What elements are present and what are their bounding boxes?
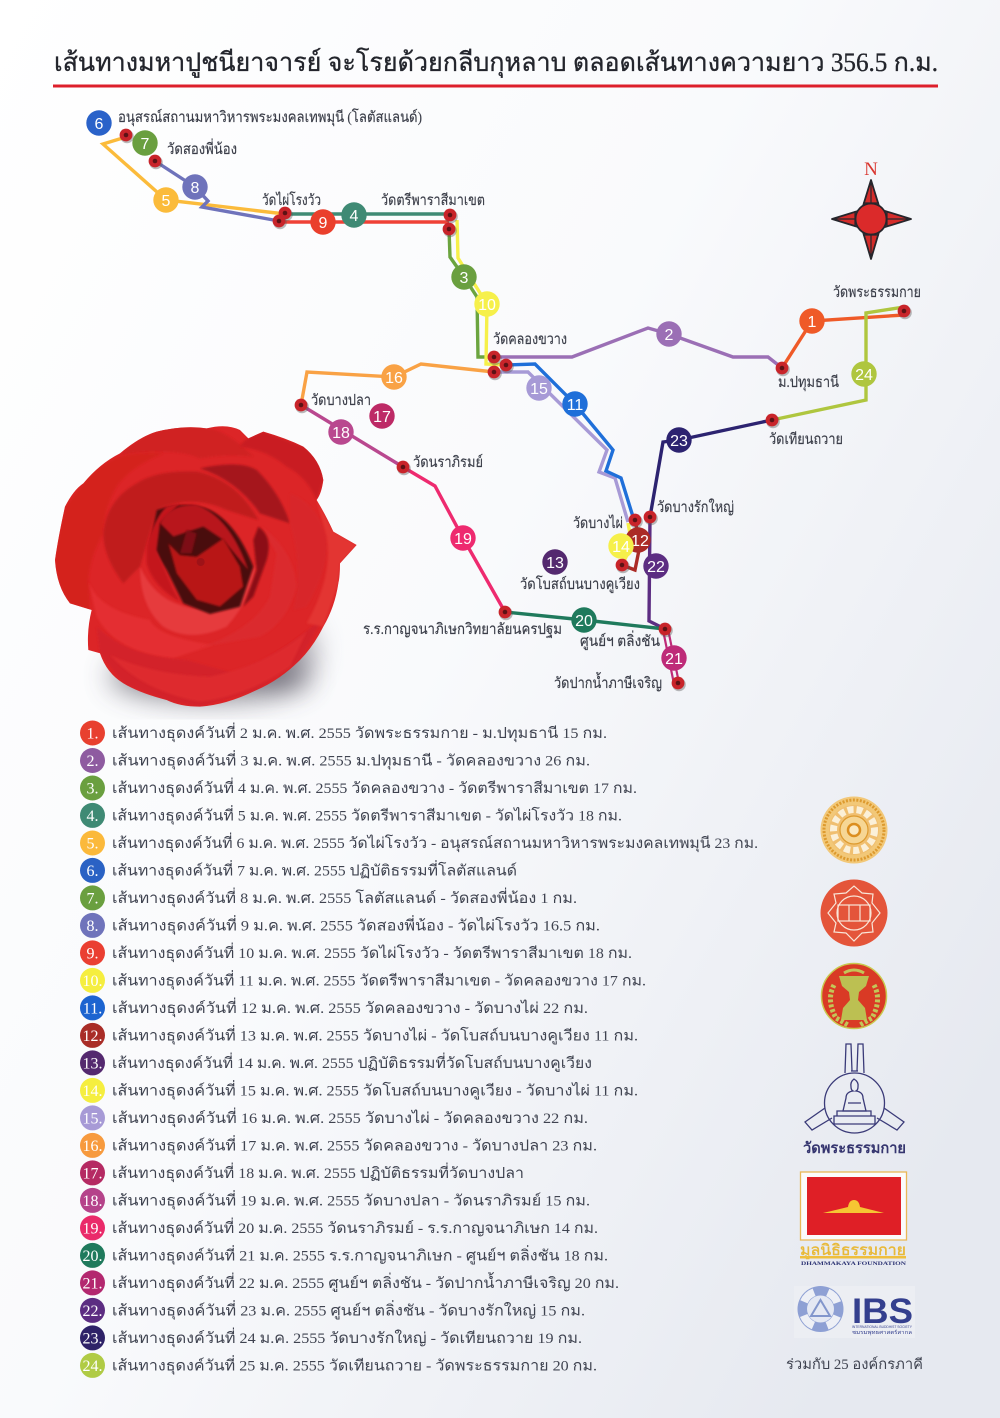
- row 21: 21.: [82, 1275, 102, 1292]
- bud: [168, 538, 243, 607]
- badge 2: [656, 321, 682, 347]
- route schedule list: [80, 720, 758, 1378]
- row 3: [80, 776, 637, 800]
- row 17: เส้นทางธุดงค์วันที่ 18 ม.ค. พ.ศ. 2555 ปฏิบัติธรรมที่วัดบางปลา: [112, 1162, 524, 1183]
- badge 21: [661, 645, 687, 671]
- row 23: เส้นทางธุดงค์วันที่ 24 ม.ค. 2555 วัดบางรักใหญ่ - วัดเทียนถวาย 19 กม.: [112, 1327, 582, 1348]
- logo: red lotus seal: [820, 880, 888, 946]
- row 6: 6.: [86, 863, 98, 880]
- badge 9: 9: [319, 215, 328, 232]
- row 2: เส้นทางธุดงค์วันที่ 3 ม.ค. พ.ศ. 2555 ม.ปทุมธานี - วัดคลองขวาง 26 กม.: [112, 750, 590, 770]
- row 7: เส้นทางธุดงค์วันที่ 8 ม.ค. พ.ศ. 2555 โลตัสแลนด์ - วัดสองพี่น้อง 1 กม.: [112, 887, 577, 908]
- row 3: เส้นทางธุดงค์วันที่ 4 ม.ค. พ.ศ. 2555 วัดคลองขวาง - วัดตรีพาราสีมาเขต 17 กม.: [112, 777, 637, 798]
- title rule: [53, 84, 938, 88]
- row 21: [80, 1270, 619, 1295]
- row 15: เส้นทางธุดงค์วันที่ 16 ม.ค. พ.ศ. 2555 วัดบางไผ่ - วัดคลองขวาง 22 กม.: [112, 1107, 588, 1128]
- row 23: [80, 1325, 582, 1350]
- badge 9: [310, 209, 336, 235]
- row 14: 14.: [82, 1083, 102, 1100]
- row 7: 7.: [86, 890, 98, 907]
- badge 3: [451, 264, 477, 290]
- row 12: 12.: [82, 1028, 102, 1045]
- row 20: 20.: [82, 1248, 102, 1265]
- upper right petal: [240, 432, 323, 500]
- label: Wat Naraphirom: วัดนราภิรมย์: [413, 454, 483, 471]
- badge 13: [542, 549, 568, 575]
- label: Wat Phai Rong Wua: วัดไผ่โรงวัว: [262, 191, 321, 209]
- row 11: [80, 995, 588, 1020]
- row 17: 17.: [82, 1165, 102, 1182]
- row 17: [80, 1160, 524, 1185]
- logo: IBS: IBS: [852, 1292, 913, 1331]
- logo: Dhammakaya Foundation: DHAMMAKAYA FOUNDATION: [801, 1261, 906, 1267]
- badge 23: 23: [670, 433, 688, 450]
- badge 19: 19: [454, 531, 472, 548]
- row 9: [80, 940, 632, 965]
- badge 11: 11: [567, 397, 583, 414]
- logo: parliament seal: [822, 964, 886, 1028]
- rose: [55, 426, 357, 707]
- route 19: [403, 467, 505, 612]
- right mid petal: [290, 493, 327, 610]
- route 21 return: [668, 629, 679, 683]
- badge 13: 13: [546, 555, 564, 572]
- route 3: [449, 229, 494, 357]
- row 12: [80, 1023, 638, 1048]
- logo: Dhammakaya Foundation: [800, 1172, 906, 1267]
- label: Wat Tri Phara Sima Khet: วัดตรีพาราสีมาเขต: [381, 192, 485, 209]
- route 12: [622, 520, 640, 570]
- badge 17: [369, 403, 395, 429]
- row 5: [80, 830, 758, 856]
- row 23: 23.: [82, 1330, 102, 1347]
- row 24: เส้นทางธุดงค์วันที่ 25 ม.ค. 2555 วัดเทียนถวาย - วัดพระธรรมกาย 20 กม.: [112, 1354, 597, 1375]
- row 19: เส้นทางธุดงค์วันที่ 20 ม.ค. 2555 วัดนราภิรมย์ - ร.ร.กาญจนาภิเษก 14 กม.: [112, 1217, 598, 1238]
- bottom highlight petal: [116, 636, 303, 700]
- badge 4: [341, 202, 367, 228]
- lower left petal: [92, 591, 205, 657]
- badge 11: [562, 391, 588, 417]
- bottom wrap petal: [99, 626, 316, 706]
- row 16: [80, 1133, 597, 1158]
- route 16: [301, 364, 494, 405]
- row 11: เส้นทางธุดงค์วันที่ 12 ม.ค. พ.ศ. 2555 วัดคลองขวาง - วัดบางไผ่ 22 กม.: [112, 997, 588, 1018]
- row 20: เส้นทางธุดงค์วันที่ 21 ม.ค. 2555 ร.ร.กาญจนาภิเษก - ศูนย์ฯ ตลิ่งชัน 18 กม.: [112, 1244, 608, 1265]
- row 18: 18.: [82, 1193, 102, 1210]
- row 2: 2.: [86, 753, 98, 770]
- row 24: 24.: [82, 1358, 102, 1375]
- row 18: [80, 1188, 590, 1213]
- route 20: [505, 612, 665, 629]
- row 1: เส้นทางธุดงค์วันที่ 2 ม.ค. พ.ศ. 2555 วัดพระธรรมกาย - ม.ปทุมธานี 15 กม.: [112, 722, 607, 743]
- right edge petal: [307, 500, 357, 627]
- row 8: 8.: [86, 918, 98, 935]
- badge 22: [643, 553, 669, 579]
- route 1: [782, 315, 904, 368]
- route 9: [279, 220, 449, 224]
- row 4: 4.: [86, 808, 98, 825]
- route 5: [103, 137, 285, 214]
- badge 21: 21: [665, 651, 683, 668]
- left outer petal: [55, 453, 163, 610]
- badge 19: [450, 525, 476, 551]
- title: เส้นทางมหาปูชนียาจารย์ จะโรยด้วยกลีบกุหลาบ ตลอดเส้นทางความยาว 356.5 ก.ม.: [54, 47, 938, 78]
- footer partner note: ร่วมกับ 25 องค์กรภาคี: [786, 1356, 923, 1373]
- badge 7: [132, 130, 158, 156]
- route 11: [506, 364, 634, 520]
- row 9: 9.: [86, 945, 98, 962]
- row 10: 10.: [82, 973, 102, 990]
- badge 15: 15: [530, 381, 548, 398]
- row 14: เส้นทางธุดงค์วันที่ 15 ม.ค. พ.ศ. 2555 วัดโบสถ์บนบางคูเวียง - วัดบางไผ่ 11 กม.: [112, 1079, 638, 1100]
- label: Wat Bang Pla: วัดบางปลา: [311, 393, 371, 409]
- label: Wat Bang Rak Yai: วัดบางรักใหญ่: [657, 498, 734, 516]
- row 13: 13.: [82, 1055, 102, 1072]
- logo: Dhammakaya Foundation: มูลนิธิธรรมกาย: [800, 1242, 906, 1259]
- label: Lotus Land: อนุสรณ์สถานมหาวิหารพระมงคลเทพมุนี (โลตัสแลนด์): [118, 108, 422, 127]
- route 15: [494, 372, 628, 522]
- badge 18: [328, 419, 354, 445]
- inner upper right petal: [200, 465, 290, 523]
- route 10: [457, 220, 506, 365]
- row 16: เส้นทางธุดงค์วันที่ 17 ม.ค. พ.ศ. 2555 วัดคลองขวาง - วัดบางปลา 23 กม.: [112, 1134, 597, 1155]
- route 8: [155, 161, 279, 221]
- label: Wat Bang Phai: วัดบางไผ่: [573, 514, 623, 532]
- row 6: เส้นทางธุดงค์วันที่ 7 ม.ค. พ.ศ. 2555 ปฏิบัติธรรมที่โลตัสแลนด์: [112, 859, 517, 880]
- badge 10: [474, 291, 500, 317]
- centre shadow: [150, 505, 253, 614]
- row 7: [80, 885, 577, 910]
- badge 5: 5: [162, 193, 171, 210]
- compass north arrow: N: [864, 159, 878, 180]
- row 13: เส้นทางธุดงค์วันที่ 14 ม.ค. พ.ศ. 2555 ปฏิบัติธรรมที่วัดโบสถ์บนบางคูเวียง: [112, 1052, 592, 1073]
- badge 22: 22: [647, 559, 665, 576]
- row 4: เส้นทางธุดงค์วันที่ 5 ม.ค. พ.ศ. 2555 วัดตรีพาราสีมาเขต - วัดไผ่โรงวัว 18 กม.: [112, 804, 622, 825]
- row 16: 16.: [82, 1138, 102, 1155]
- badge 14: [608, 533, 634, 559]
- lower right inner petal: [248, 586, 296, 630]
- map place labels: [118, 108, 921, 692]
- route 24: [772, 307, 904, 420]
- badge 17: 17: [373, 409, 391, 426]
- logo: IBS: INTERNATIONAL BUDDHIST SOCIETY: [852, 1324, 912, 1329]
- row 20: [80, 1243, 608, 1268]
- badge 12: 12: [631, 533, 649, 550]
- badge 6: [86, 110, 112, 136]
- row 22: เส้นทางธุดงค์วันที่ 23 ม.ค. 2555 ศูนย์ฯ ตลิ่งชัน - วัดบางรักใหญ่ 15 กม.: [112, 1299, 585, 1320]
- badge 16: [381, 364, 407, 390]
- rose shadow: [110, 618, 316, 700]
- badge 14: 14: [612, 539, 630, 556]
- row 2: [80, 748, 590, 773]
- route 2: [494, 328, 782, 368]
- centre top fold: [160, 505, 248, 570]
- row 15: [80, 1105, 588, 1130]
- label: Wat Song Phi Nong: วัดสองพี่น้อง: [167, 138, 237, 158]
- logo: Wat Phra Dhammakaya: วัดพระธรรมกาย: [803, 1140, 906, 1157]
- row 5: เส้นทางธุดงค์วันที่ 6 ม.ค. พ.ศ. 2555 วัดไผ่โรงวัว - อนุสรณ์สถานมหาวิหารพระมงคลเทพมุนี 23 กม.: [112, 832, 758, 853]
- map route number badges: [86, 110, 877, 671]
- label: Wat Bot Bon Bang Khu Wiang: วัดโบสถ์บนบางคูเวียง: [520, 575, 640, 593]
- badge 4: 4: [350, 208, 359, 225]
- route 22: [649, 517, 665, 629]
- map pins: [120, 129, 912, 691]
- route 18: [301, 405, 403, 467]
- logo: Wat Phra Dhammakaya: [803, 1044, 906, 1157]
- row 6: [80, 858, 517, 883]
- badge 7: 7: [141, 136, 150, 153]
- front petal: [140, 563, 256, 635]
- row 3: 3.: [86, 780, 98, 798]
- row 19: [80, 1215, 598, 1240]
- label: Taling Chan centre: ศูนย์ฯ ตลิ่งชัน: [580, 630, 660, 650]
- row 10: เส้นทางธุดงค์วันที่ 11 ม.ค. พ.ศ. 2555 วัดตรีพาราสีมาเขต - วัดคลองขวาง 17 กม.: [112, 969, 646, 990]
- row 1: [80, 720, 607, 746]
- badge 8: 8: [191, 180, 200, 197]
- badge 20: [571, 607, 597, 633]
- badge 3: 3: [460, 270, 469, 287]
- row 12: เส้นทางธุดงค์วันที่ 13 ม.ค. พ.ศ. 2555 วัดบางไผ่ - วัดโบสถ์บนบางคูเวียง 11 กม.: [112, 1024, 638, 1045]
- row 22: [80, 1298, 585, 1323]
- row 18: เส้นทางธุดงค์วันที่ 19 ม.ค. พ.ศ. 2555 วัดบางปลา - วัดนราภิรมย์ 15 กม.: [112, 1189, 590, 1210]
- badge 20: 20: [575, 613, 593, 630]
- row 4: [80, 803, 622, 828]
- badge 24: 24: [855, 367, 873, 384]
- label: Wat Thian Thawai: วัดเทียนถวาย: [769, 431, 843, 448]
- route lines: [103, 137, 904, 684]
- centre left fold: [147, 503, 180, 602]
- badge 12: [625, 527, 651, 553]
- badge 16: 16: [385, 370, 403, 387]
- badge 1: 1: [808, 314, 817, 331]
- badge 6: 6: [95, 116, 104, 133]
- inner left petal: [103, 471, 258, 583]
- badge 8: [182, 174, 208, 200]
- badge 10: 10: [478, 297, 496, 314]
- back petal: [120, 426, 253, 458]
- badge 23: [666, 427, 692, 453]
- row 22: 22.: [82, 1303, 102, 1320]
- route 21: [663, 630, 674, 684]
- route 23: [650, 420, 772, 517]
- badge 2: 2: [665, 327, 674, 344]
- logo: dharma wheel: [820, 796, 888, 864]
- label: Wat Paknam: วัดปากน้ำภาษีเจริญ: [554, 672, 662, 692]
- row 8: เส้นทางธุดงค์วันที่ 9 ม.ค. พ.ศ. 2555 วัดสองพี่น้อง - วัดไผ่โรงวัว 16.5 กม.: [112, 914, 600, 935]
- row 14: [80, 1078, 638, 1103]
- row 1: 1.: [86, 726, 98, 742]
- label: Wat Khlong Khwang: วัดคลองขวาง: [493, 332, 567, 348]
- badge 24: [851, 361, 877, 387]
- logo: IBS: ชมรมพุทธศาสตร์สากล: [852, 1329, 912, 1336]
- row 15: 15.: [82, 1110, 102, 1127]
- compass north arrow: [832, 159, 911, 259]
- label: Kanchanaphisek school: ร.ร.กาญจนาภิเษกวิทยาลัยนครปฐม: [363, 621, 562, 638]
- row 24: [80, 1353, 597, 1378]
- row 8: [80, 913, 600, 938]
- row 10: [80, 968, 646, 993]
- row 21: เส้นทางธุดงค์วันที่ 22 ม.ค. 2555 ศูนย์ฯ ตลิ่งชัน - วัดปากน้ำภาษีเจริญ 20 กม.: [112, 1272, 619, 1293]
- route 14: [622, 523, 632, 565]
- route 4: [285, 212, 450, 216]
- logo: IBS: [794, 1285, 915, 1338]
- row 5: 5.: [86, 836, 98, 852]
- label: Pathum Thani: ม.ปทุมธานี: [778, 374, 839, 392]
- row 13: [80, 1050, 592, 1075]
- label: Wat Phra Dhammakaya: วัดพระธรรมกาย: [833, 285, 921, 301]
- badge 5: [153, 187, 179, 213]
- row 9: เส้นทางธุดงค์วันที่ 10 ม.ค. พ.ศ. 2555 วัดไผ่โรงวัว - วัดตรีพาราสีมาเขต 18 กม.: [112, 942, 632, 963]
- badge 18: 18: [332, 425, 350, 442]
- row 19: 19.: [82, 1220, 102, 1237]
- row 11: 11.: [83, 1000, 102, 1017]
- badge 15: [526, 375, 552, 401]
- badge 1: [799, 308, 825, 334]
